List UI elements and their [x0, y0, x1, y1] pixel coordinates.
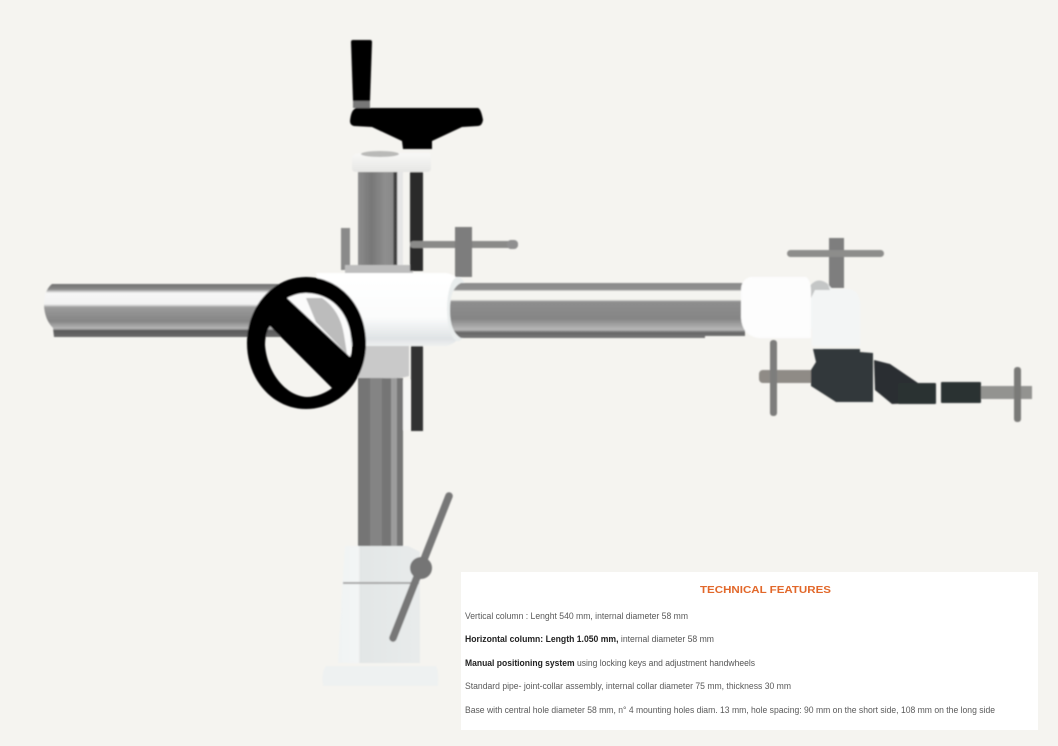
end collar: [741, 277, 860, 346]
feature: positioning system: Manual positioning system using locking keys and adjustment handwheels: [465, 658, 755, 668]
end shaft and cross pin: [981, 367, 1032, 422]
prohibition circle symbol: [247, 277, 366, 409]
panel heading: TECHNICAL FEATURES: [700, 584, 831, 596]
toothed rack: [410, 171, 423, 431]
vertical column: upper section: [341, 172, 413, 274]
main collar: [316, 273, 469, 346]
vertical column: lower section: [358, 378, 410, 548]
end clamp lever: top: [787, 238, 884, 288]
dark articulated joint: [811, 349, 981, 404]
end clamp lever: bottom: [759, 340, 819, 416]
top collar cap: [361, 151, 399, 157]
base pedestal: [322, 546, 438, 686]
top handwheel: [350, 40, 483, 149]
clamp lever: top of main collar: [410, 227, 518, 277]
base locking lever: [393, 496, 449, 638]
feature: base: Base with central hole diameter 58 mm, n° 4 mounting holes diam. 13 mm, hole spacing: 90 mm on the short side, 108 mm on the long side: [465, 705, 995, 715]
collar lower neck: [358, 340, 409, 378]
technical features panel: [461, 572, 1038, 730]
feature: pipe assembly: Standard pipe- joint-collar assembly, internal collar diameter 75 mm, thickness 30 mm: [465, 681, 791, 691]
feature: horizontal column: Horizontal column: Length 1.050 mm, internal diameter 58 mm: [465, 634, 714, 644]
right horizontal tube: [450, 283, 745, 338]
feature: vertical column: Vertical column : Lenght 540 mm, internal diameter 58 mm: [465, 611, 688, 621]
left horizontal tube: [44, 284, 300, 337]
top collar: [352, 153, 431, 172]
